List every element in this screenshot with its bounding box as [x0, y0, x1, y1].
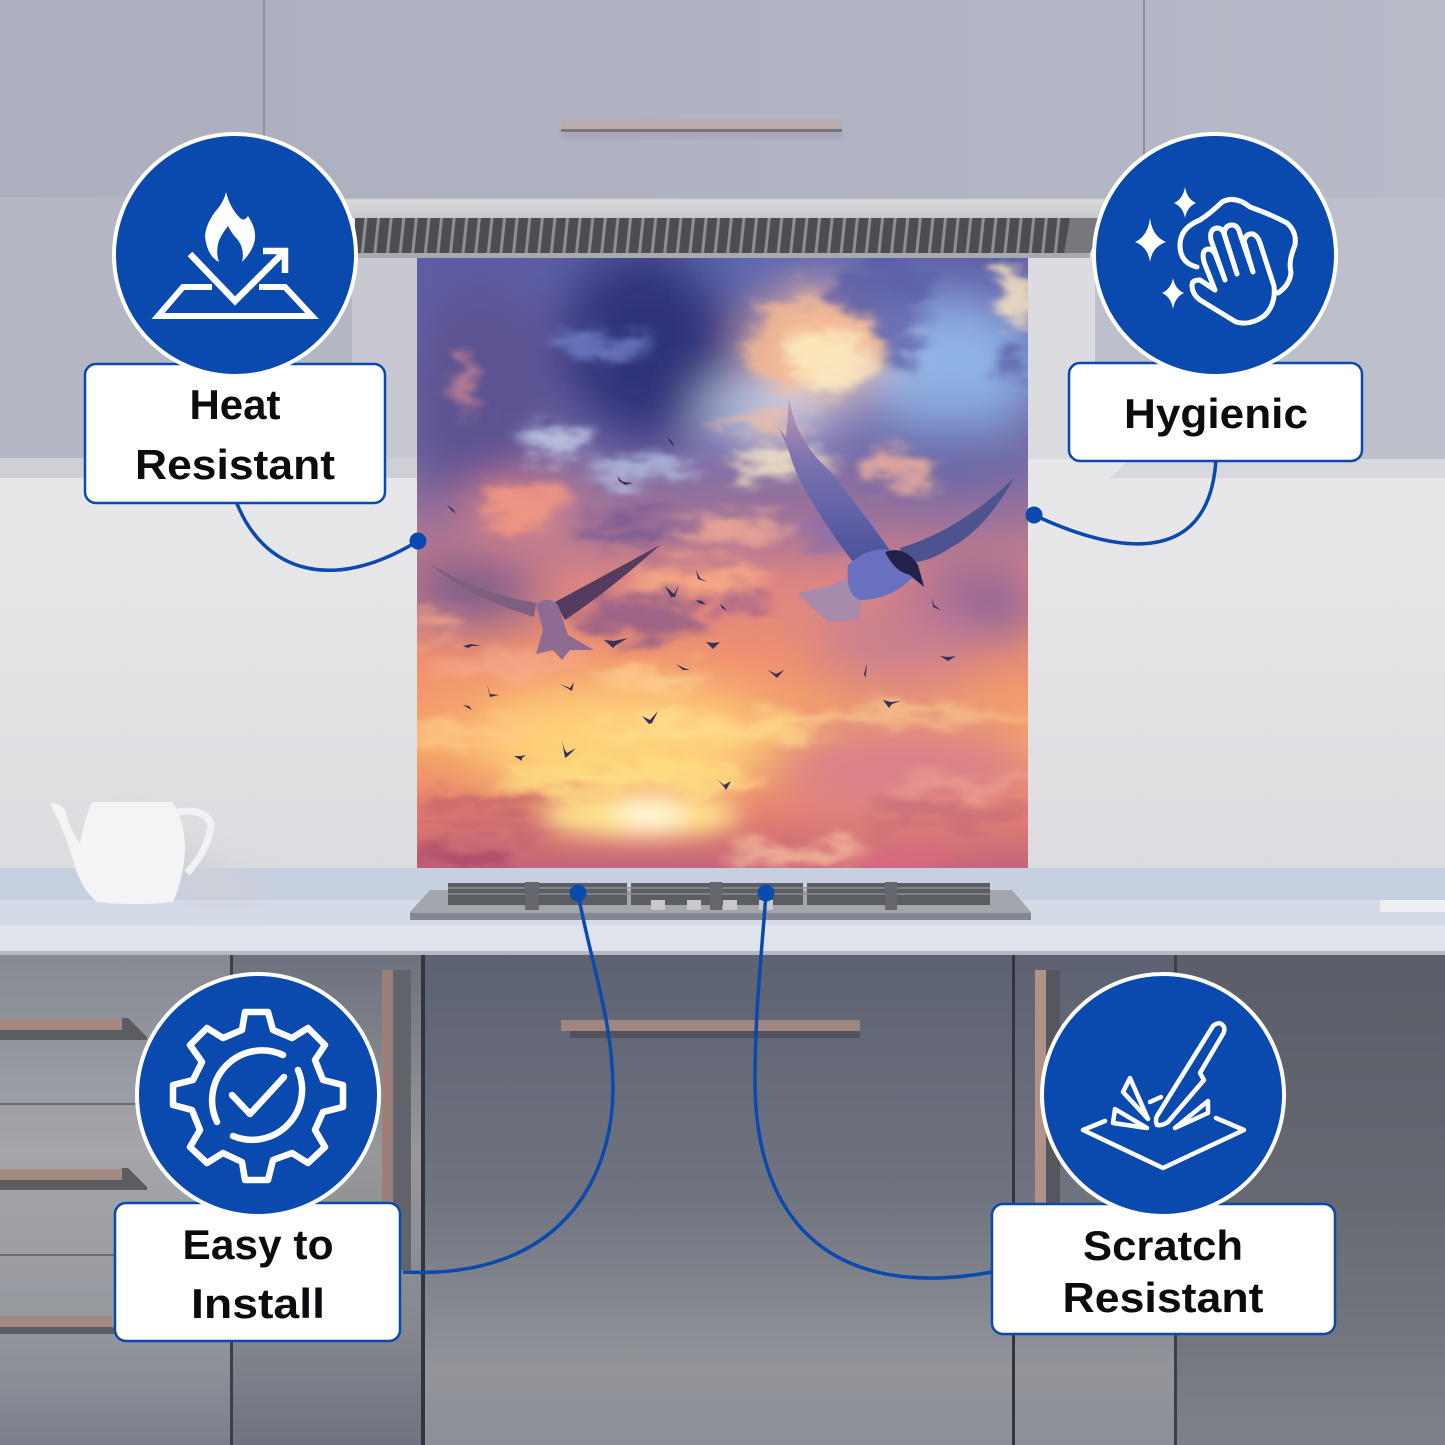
upper cabinets [0, 0, 1445, 478]
connector: hygienic [1026, 459, 1216, 544]
label box: Resistant [135, 441, 335, 488]
connector: heat resistant [236, 501, 426, 570]
broad colour masses [400, 245, 1040, 820]
label box: Resistant [1062, 1274, 1264, 1321]
hob [410, 882, 1031, 920]
label box: Heat [189, 381, 281, 428]
icon circle: flame on surface [114, 134, 356, 376]
body [848, 549, 924, 600]
badge: hygienic [1069, 134, 1362, 461]
label box: Scratch [1083, 1222, 1243, 1269]
sun glow [540, 793, 740, 837]
icon circle: gear with check [137, 974, 379, 1216]
badge: scratch resistant [992, 974, 1335, 1334]
icon circle: wiping hand with sparkles [1094, 134, 1336, 376]
label box [992, 1204, 1335, 1334]
printed glass panel: sunset sky with birds [400, 245, 1042, 871]
white jug [50, 802, 270, 904]
label box [1069, 363, 1362, 461]
badge: heat resistant [85, 134, 385, 503]
label box: Hygienic [1124, 390, 1308, 437]
icon circle: knife scratching a surface [1042, 974, 1284, 1216]
worktop [0, 868, 1445, 955]
lower cabinets [0, 955, 1445, 1445]
badge: easy to install [115, 974, 400, 1341]
small birds [447, 437, 956, 790]
kitchen wall [0, 0, 1445, 880]
cloud detail [400, 260, 1042, 871]
near wing [900, 478, 1014, 562]
extractor hood [340, 197, 1105, 258]
label box: Easy to [182, 1221, 334, 1268]
label box [85, 364, 385, 503]
far wing [779, 398, 892, 568]
large bird left [429, 545, 660, 660]
lower handles [0, 970, 1060, 1334]
cabinet handle [561, 119, 842, 138]
label box: Install [191, 1280, 325, 1327]
head [885, 550, 924, 587]
label box [115, 1203, 400, 1341]
connector: scratch resistant [755, 884, 992, 1278]
tail [797, 578, 862, 622]
connector: easy to install [403, 884, 613, 1272]
large bird right [779, 398, 1014, 622]
